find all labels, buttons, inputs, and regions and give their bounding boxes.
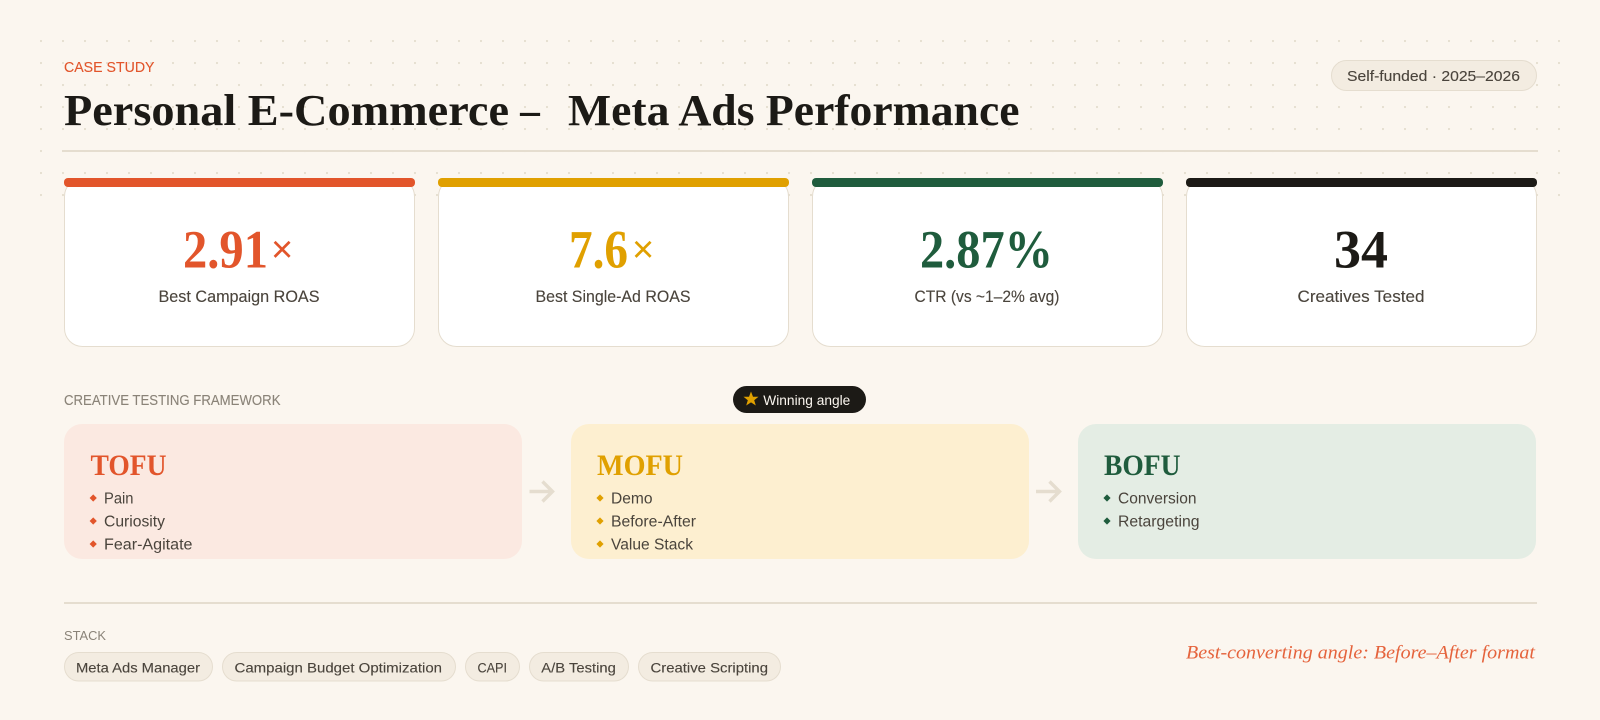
chip: Campaign Budget Optimization: Campaign Budget Optimization bbox=[234, 660, 442, 675]
chip: A/B Testing bbox=[530, 652, 628, 681]
icon: star bbox=[744, 392, 758, 406]
badge: winning angle bbox=[733, 386, 866, 413]
arrow: MOFU to BOFU bbox=[1036, 482, 1060, 502]
title bbox=[64, 85, 1020, 135]
label: Best Campaign ROAS bbox=[158, 288, 320, 306]
list item: Before-After: Before-After bbox=[611, 513, 696, 530]
chip: Creative Scripting bbox=[638, 652, 780, 681]
value: 2.91 bbox=[183, 220, 268, 280]
arrow: TOFU to MOFU bbox=[530, 482, 552, 502]
eyebrow: case study: CASE STUDY bbox=[64, 59, 154, 76]
badge label: Winning angle bbox=[763, 393, 850, 408]
chip: A/B Testing: A/B Testing bbox=[541, 660, 616, 675]
chip: CAPI bbox=[466, 652, 520, 681]
list item: Retargeting: Retargeting bbox=[1118, 513, 1200, 530]
label: Creatives Tested bbox=[1298, 288, 1424, 306]
tool chips bbox=[64, 652, 780, 681]
chip: Meta Ads Manager bbox=[64, 652, 212, 681]
title: Personal E-Commerce bbox=[64, 85, 509, 135]
panel: MOFU bbox=[571, 424, 1029, 559]
value: 7.6 bbox=[569, 220, 628, 280]
section heading: creative testing framework: CREATIVE TESTING FRAMEWORK bbox=[64, 393, 281, 409]
value: 2.87% bbox=[920, 220, 1053, 280]
list item: Demo: Demo bbox=[611, 490, 652, 507]
value: 34 bbox=[1334, 220, 1388, 280]
multiplier sign: × bbox=[632, 229, 654, 271]
heading: MOFU bbox=[597, 449, 683, 482]
chip: Campaign Budget Optimization bbox=[222, 652, 456, 681]
KPI card: best campaign ROAS bbox=[64, 178, 415, 346]
section heading: stack: STACK bbox=[64, 628, 106, 643]
label: CTR (vs ~1–2% avg) bbox=[914, 288, 1060, 306]
title: — bbox=[520, 85, 540, 135]
multiplier sign: × bbox=[271, 229, 293, 271]
title: Meta Ads Performance bbox=[568, 85, 1020, 135]
panel: BOFU bbox=[1078, 424, 1536, 559]
badge: self-funded dates bbox=[1332, 60, 1536, 90]
callout: best-converting angle: Best-converting angle: Before–After format bbox=[1186, 642, 1536, 663]
list item: Fear-Agitate: Fear-Agitate bbox=[104, 536, 192, 553]
list item: Pain bbox=[90, 490, 134, 507]
header bbox=[64, 59, 1536, 135]
chip: CAPI: CAPI bbox=[478, 660, 507, 675]
list item: Conversion: Conversion bbox=[1118, 490, 1196, 507]
list item: Pain: Pain bbox=[104, 490, 134, 507]
heading: BOFU bbox=[1104, 449, 1180, 482]
badge: self-funded dates: Self-funded · 2025–2026 bbox=[1347, 68, 1520, 85]
list item: Value Stack: Value Stack bbox=[611, 536, 693, 553]
heading: TOFU bbox=[90, 449, 166, 482]
KPI card: CTR bbox=[812, 178, 1163, 346]
list item: Curiosity: Curiosity bbox=[104, 513, 165, 530]
chip: Meta Ads Manager: Meta Ads Manager bbox=[76, 660, 201, 675]
KPI card: creatives tested bbox=[1186, 178, 1537, 346]
panel: TOFU bbox=[64, 424, 522, 559]
label: Best Single-Ad ROAS bbox=[536, 288, 690, 306]
chip: Creative Scripting: Creative Scripting bbox=[650, 660, 768, 675]
KPI card: best single-ad ROAS bbox=[438, 178, 789, 346]
